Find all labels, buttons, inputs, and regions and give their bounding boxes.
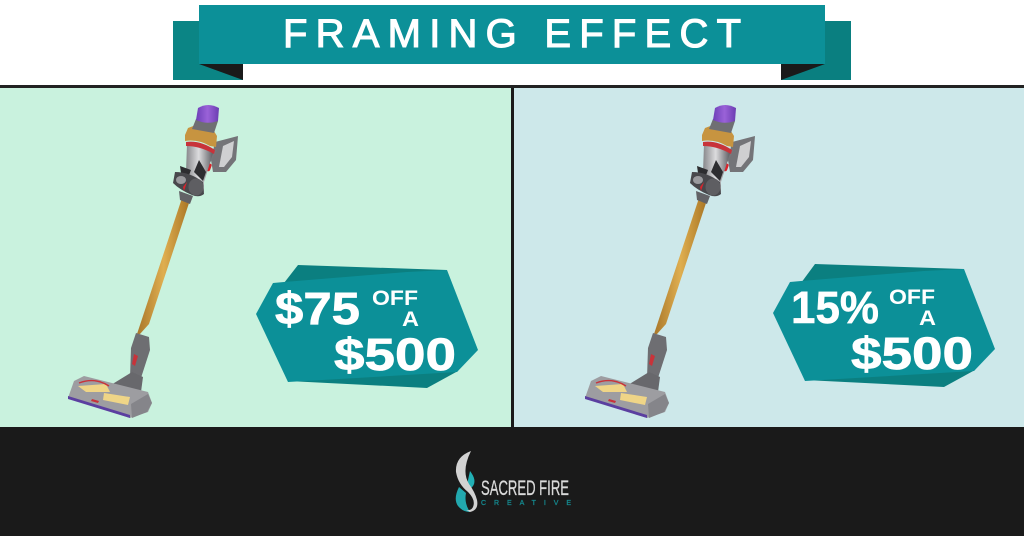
footer band <box>0 427 1024 536</box>
callout: 15% off a $500: A <box>919 307 936 330</box>
logo: Sacred Fire Creative <box>456 451 571 512</box>
panel: left, dollar discount <box>0 88 511 427</box>
callout: $75 off a $500: A <box>402 308 419 331</box>
top rule and centre divider <box>0 85 1024 427</box>
icon: cordless vacuum, left <box>68 105 238 418</box>
callout: $75 off a $500: $75 <box>275 283 360 334</box>
callout: $75 off a $500 <box>256 265 478 388</box>
callout: 15% off a $500 <box>773 264 995 387</box>
logo: Sacred Fire Creative: SACRED FIRE <box>481 477 569 500</box>
title: FRAMING EFFECT <box>283 12 741 56</box>
callout: 15% off a $500: OFF <box>889 286 935 309</box>
logo: Sacred Fire Creative: CREATIVE <box>481 500 571 507</box>
callout: 15% off a $500: 15% <box>791 282 879 333</box>
callout: 15% off a $500: $500 <box>851 328 973 379</box>
callout: $75 off a $500: $500 <box>334 329 456 380</box>
icon: flame <box>456 451 477 512</box>
panel: right, percent discount <box>514 88 1024 427</box>
title ribbon <box>173 5 851 80</box>
icon: cordless vacuum, right <box>585 105 755 418</box>
callout: $75 off a $500: OFF <box>372 287 418 310</box>
